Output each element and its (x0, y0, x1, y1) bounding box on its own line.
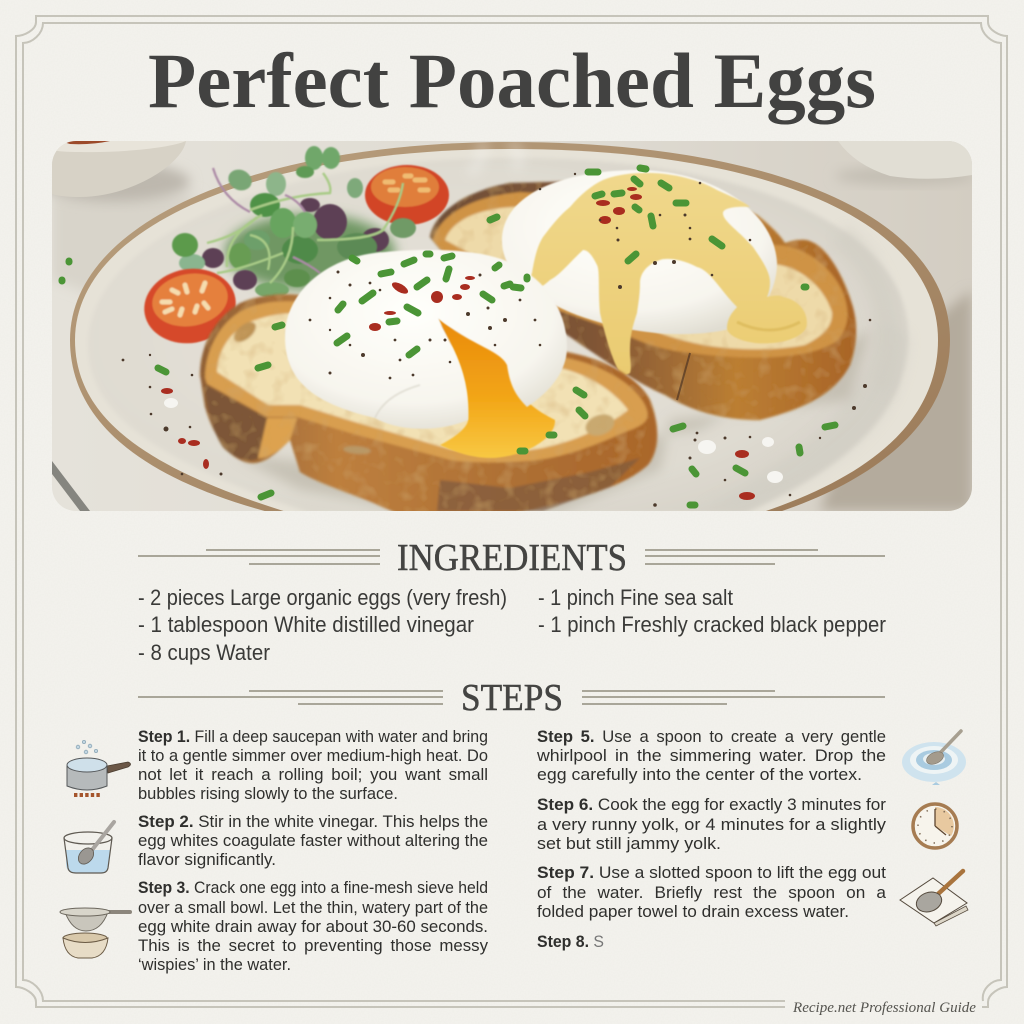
chives (62, 168, 835, 505)
step 1 text: Step 1. Fill a deep saucepan with water and bring (138, 728, 488, 746)
linen shading (52, 195, 972, 511)
back tomato (365, 165, 449, 225)
yolk (438, 318, 555, 458)
black pepper specks (122, 173, 871, 507)
microgreens (172, 146, 416, 298)
back toast crust crack (677, 353, 690, 400)
cup at top right (835, 141, 975, 185)
red pepper flakes (161, 187, 755, 500)
ingredients list: - 2 pieces Large organic eggs (very fresh) (138, 585, 507, 610)
plate shadow below toast (235, 330, 870, 511)
step 7 text: of the water. Briefly rest the spoon on a (537, 884, 886, 902)
step 1 text: bubbles rising slowly to the surface. (138, 785, 398, 803)
step 1 text (138, 728, 488, 803)
ingredients list (138, 585, 886, 665)
footer credit: Recipe.net Professional Guide (792, 1000, 976, 1016)
step 5 text (536, 728, 886, 784)
ingredients list: - 1 tablespoon White distilled vinegar (138, 612, 474, 637)
step 7 text: Step 7. Use a slotted spoon to lift the egg out (537, 864, 887, 882)
photo: poached eggs on toast (40, 141, 975, 515)
plate (70, 142, 950, 515)
icon: paper towel with slotted spoon (900, 871, 968, 926)
side bowl with rust contents (40, 141, 190, 202)
title: Perfect Poached Eggs (148, 37, 876, 124)
step 3 text: egg white drain away for about 30-60 seconds. (138, 918, 488, 936)
step 3 text: ‘wispies’ in the water. (138, 956, 291, 974)
front toast (200, 294, 657, 515)
step 8 text: Step 8. S (537, 933, 604, 951)
step 1 text: not let it reach a rolling boil; you want small (138, 766, 488, 784)
front tomato (143, 268, 237, 344)
hollandaise sauce (531, 173, 807, 375)
step 6 text: Step 6. Cook the egg for exactly 3 minutes for (537, 796, 887, 814)
step 5 text: Step 5. Use a spoon to create a very gentle (537, 728, 886, 746)
icon: clock (913, 804, 957, 848)
knife (52, 461, 90, 511)
heading: ingredients (138, 537, 885, 579)
step 5 text: whirlpool in the simmering water. Drop the (536, 747, 886, 765)
ingredients list: - 1 pinch Fine sea salt (538, 585, 734, 610)
microgreens shadow clump (225, 214, 395, 290)
heading: ingredients: INGREDIENTS (397, 537, 627, 579)
sea salt crystals (164, 398, 783, 483)
step 2 text: flavor significantly. (138, 851, 276, 869)
step 6 text: a very runny yolk, or 4 minutes for a slightly (537, 816, 887, 834)
step 3 text: Step 3. Crack one egg into a fine-mesh sieve held (138, 879, 488, 897)
heading: steps (138, 677, 885, 719)
step 5 text: egg carefully into the center of the vortex. (537, 766, 862, 784)
icon: sieve and bowl (60, 908, 130, 958)
step 1 text: it to a gentle simmer over medium-high heat. Do (138, 747, 488, 765)
step 7 text (537, 864, 887, 921)
step 3 text: over a small bowl. Let the thin, watery part of the (138, 899, 488, 917)
steam (474, 142, 526, 162)
heading: steps: STEPS (461, 677, 563, 719)
step 6 text: set but still jammy yolk. (537, 835, 721, 853)
icon: whirlpool with spoon (902, 731, 966, 785)
back toast (430, 180, 856, 420)
icon: glass with spoon (64, 822, 114, 873)
ingredients list: - 1 pinch Freshly cracked black pepper (538, 612, 886, 637)
step 2 text (138, 813, 488, 869)
step 2 text: Step 2. Stir in the white vinegar. This helps the (138, 813, 488, 831)
back egg (502, 170, 777, 334)
step 6 text (537, 796, 887, 853)
front egg (285, 250, 567, 429)
step 7 text: folded paper towel to drain excess water. (537, 903, 849, 921)
step 3 text (138, 879, 489, 974)
step 2 text: egg whites coagulate faster without altering the (138, 832, 488, 850)
icon: saucepan (67, 740, 130, 795)
ingredients list: - 8 cups Water (138, 640, 270, 665)
step 3 text: This is the secret to preventing those messy (138, 937, 489, 955)
